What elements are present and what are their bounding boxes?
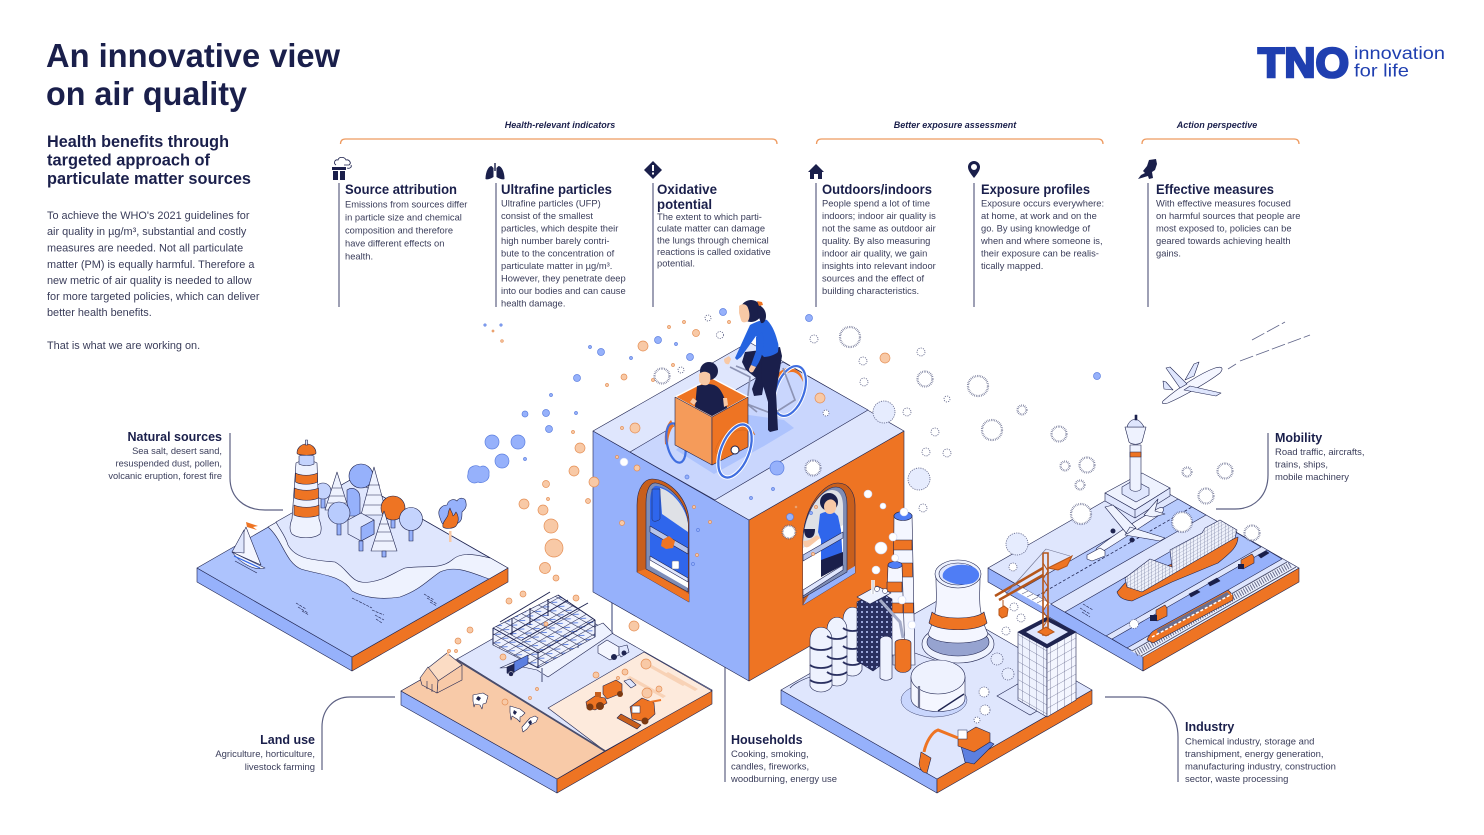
particles: peach coarse matter (448, 320, 890, 705)
truck left (507, 655, 528, 676)
trucks and cars on road (1150, 551, 1269, 621)
icon: chimney with cloud (332, 157, 351, 180)
storage tank (901, 660, 967, 717)
bracket: Health-relevant indicators (340, 120, 777, 144)
icon: lungs (486, 163, 504, 179)
panel: outdoors/indoors: building characteristics. (822, 286, 919, 296)
panel: outdoors/indoors: indoor air quality, we gain (822, 248, 927, 258)
panel: outdoors/indoors: sources and the effect of (822, 274, 925, 284)
platform base (401, 602, 712, 793)
control tower (1105, 415, 1170, 518)
panel: outdoors/indoors: Outdoors/indoors (822, 182, 932, 197)
combine harvester (617, 698, 661, 729)
callout: households: woodburning, energy use (730, 774, 837, 785)
platform base (781, 601, 1092, 793)
panel: effective measures: geared towards achieving health (1156, 236, 1291, 246)
intro text: new metric of air quality is needed to allow (47, 275, 252, 287)
panel: source attribution: in particle size and chemical (345, 212, 462, 222)
subheading: targeted approach of (47, 152, 211, 170)
title: An innovative view (46, 37, 340, 74)
intro text: That is what we are working on. (47, 340, 200, 352)
platform: mobility (988, 415, 1299, 671)
panel: outdoors/indoors: indoors; indoor air quality is (822, 211, 936, 221)
panel: effective measures: With effective measures focused (1156, 198, 1291, 208)
callout: industry (1105, 697, 1336, 785)
icon: warning diamond (644, 161, 662, 179)
platform base (988, 479, 1299, 671)
title: on air quality (46, 75, 248, 112)
ground shadow (676, 410, 794, 474)
panel: exposure profiles: Exposure profiles (981, 182, 1090, 197)
logo: TNO innovation for life (1258, 39, 1445, 86)
tractor with trailer and bale (586, 679, 636, 710)
runway (1017, 499, 1206, 608)
truck right (598, 640, 629, 660)
right window (803, 483, 855, 605)
subheading: particulate matter sources (47, 170, 251, 188)
panel: exposure profiles: when and where someone is, (980, 236, 1103, 246)
greenhouse (493, 592, 595, 668)
land and sand (268, 479, 508, 598)
callout: industry: sector, waste processing (1185, 774, 1288, 785)
particles: ultrafine dotted rings (654, 315, 1260, 723)
panel: ultrafine particles: consist of the smallest (501, 211, 593, 221)
panel: outdoors/indoors (808, 164, 936, 307)
callout: households: candles, fireworks, (731, 762, 809, 772)
barn (420, 650, 462, 693)
panel: exposure profiles: Exposure occurs everywhere: (981, 198, 1104, 208)
platform: natural sources (197, 440, 508, 671)
yard around greenhouse (500, 623, 613, 677)
panel: source attribution (332, 157, 467, 307)
panel: ultrafine particles: However, they penetrate deep (501, 274, 626, 284)
panel: source attribution: have different effects on (345, 238, 444, 248)
cargo box back and child (675, 362, 748, 417)
icon: map of the Netherlands (1138, 159, 1157, 179)
sailboat (232, 522, 265, 573)
panel: ultrafine particles: particulate matter in µg/m³. (501, 261, 612, 271)
panel: effective measures: on harmful sources that people are (1156, 211, 1300, 221)
panel: ultrafine particles: particles, which despite their (501, 224, 618, 234)
callout: natural sources: volcanic eruption, forest fire (108, 471, 222, 481)
panel: outdoors/indoors: not the same as outdoor air (822, 224, 936, 234)
container ship (1117, 520, 1238, 601)
logo: TNO innovation for life: innovation (1354, 43, 1445, 63)
callout: industry: Chemical industry, storage and (1185, 736, 1314, 748)
subheading: Health benefits through (47, 133, 229, 151)
platform base (197, 479, 508, 671)
panel: effective measures: most exposed to, policies can be (1156, 224, 1292, 234)
platform: industry (781, 512, 1092, 793)
cows (473, 693, 538, 732)
flying airplane with contrails (1162, 322, 1310, 404)
callout: industry: transhipment, energy generation, (1185, 749, 1324, 760)
intro text: matter (PM) is equally harmful. Therefore a (47, 259, 255, 271)
panel: exposure profiles (968, 161, 1104, 307)
callout: land use: Agriculture, horticulture, (215, 749, 315, 760)
water (1065, 523, 1261, 636)
callout: natural sources (108, 430, 283, 510)
logo: TNO innovation for life: for life (1354, 60, 1409, 80)
panel: oxidative potential: potential (657, 197, 712, 212)
panel: ultrafine particles: into our bodies and can cause (501, 286, 626, 296)
callout: households: Households (731, 733, 803, 747)
callout: land use: Land use (260, 733, 315, 747)
orange vessel (895, 639, 911, 672)
logo: TNO innovation for life: TNO (1258, 39, 1349, 86)
ground vehicle (1087, 548, 1105, 561)
bracket: Better exposure assessment: Better exposure assessment (894, 120, 1017, 130)
panel: exposure profiles: their exposure can be realis- (981, 248, 1099, 258)
intro text: for more targeted policies, which can deliver (47, 291, 260, 303)
excavator (919, 727, 994, 773)
rear wheel and fender (768, 362, 812, 420)
bracket: Better exposure assessment (816, 120, 1103, 144)
cube: household (593, 342, 904, 681)
callout: natural sources: resuspended dust, pollen, (116, 458, 222, 468)
title (46, 37, 340, 112)
panel: exposure profiles: go. By using knowledge of (981, 224, 1090, 234)
panel: exposure profiles: tically mapped. (981, 261, 1043, 271)
panel: exposure profiles: at home, at work and on the (981, 211, 1097, 221)
refinery tower (857, 580, 903, 680)
silos (810, 607, 862, 692)
panel: oxidative potential: potential. (657, 259, 695, 269)
blue left face (593, 431, 749, 681)
cargo bike with rider and child (663, 300, 812, 482)
icon: house (808, 164, 824, 179)
panel: ultrafine particles: Ultrafine particles (501, 182, 612, 197)
left front wheel (663, 420, 689, 464)
roof (593, 342, 904, 520)
callout: mobility: trains, ships, (1275, 460, 1328, 470)
panel: ultrafine particles: health damage. (501, 298, 565, 308)
road (1112, 550, 1282, 648)
rear leg (742, 350, 766, 396)
bike frame and handlebar (730, 366, 795, 414)
chimney rear (892, 512, 915, 665)
intro text: measures are needed. Not all particulate (47, 242, 243, 254)
callout: natural sources: Sea salt, desert sand, (132, 446, 222, 456)
callout: mobility: Mobility (1275, 431, 1322, 445)
panel: source attribution: Emissions from sources differ (345, 200, 467, 210)
callout: mobility: mobile machinery (1275, 472, 1349, 483)
callout: natural sources: Natural sources (128, 430, 222, 444)
callout: land use (215, 697, 395, 773)
callout: industry: manufacturing industry, construction (1185, 762, 1336, 772)
intro text: To achieve the WHO's 2021 guidelines for (47, 210, 250, 222)
subheading (47, 133, 251, 188)
fence (457, 660, 605, 751)
panel: effective measures: gains. (1156, 248, 1181, 258)
bracket: Action perspective: Action perspective (1176, 120, 1257, 130)
building under construction (1018, 617, 1076, 717)
orange right face (749, 431, 904, 681)
train (1147, 590, 1233, 643)
intro text: better health benefits. (47, 307, 152, 319)
panel: ultrafine particles: high number barely contri- (501, 236, 610, 246)
callout: mobility (1216, 431, 1365, 509)
cargo box front (675, 397, 748, 465)
panel: outdoors/indoors: People spend a lot of time (822, 198, 930, 208)
left window (637, 479, 689, 602)
callout: industry: Industry (1185, 720, 1234, 734)
panel: outdoors/indoors: quality. By also measuring (822, 236, 930, 246)
intro text (47, 210, 260, 352)
panel: source attribution: composition and therefore (345, 226, 453, 236)
ripple (1080, 604, 1093, 617)
panel: oxidative potential: The extent to which parti- (657, 212, 762, 222)
bracket: Health-relevant indicators: Health-relevant indicators (505, 120, 615, 130)
panel: oxidative potential: reactions is called oxidative (657, 247, 771, 257)
platform: land use (401, 592, 712, 793)
panel: ultrafine particles: bute to the concentration of (501, 248, 615, 258)
panel: oxidative potential: culate matter can damage (657, 224, 765, 234)
cooling tower (922, 560, 994, 663)
icon: location pin (968, 161, 980, 178)
intro text: air quality in µg/m³, substantial and costly (47, 226, 247, 238)
bracket: Action perspective (1142, 120, 1299, 144)
callout: households (725, 640, 837, 785)
panel: oxidative potential: Oxidative (657, 182, 717, 197)
right front wheel and fender (712, 420, 758, 482)
particles: blue matter (468, 308, 1101, 566)
lamp posts (542, 597, 612, 682)
fields (401, 652, 712, 779)
parked airplane (1096, 499, 1165, 551)
panel: source attribution: health. (345, 252, 373, 262)
fire and smoke (439, 498, 466, 542)
lighthouse (290, 440, 321, 538)
panel: ultrafine particles (486, 163, 626, 308)
callout: households: Cooking, smoking, (731, 749, 809, 760)
panel: effective measures: Effective measures (1156, 182, 1274, 197)
panel: effective measures (1138, 159, 1300, 307)
panel: outdoors/indoors: insights into relevant indoor (822, 261, 936, 271)
rider (724, 300, 782, 432)
callout: mobility: Road traffic, aircrafts, (1275, 447, 1365, 458)
panel: oxidative potential: the lungs through chemical (657, 235, 769, 245)
foundations (790, 652, 1076, 715)
panel: oxidative potential (644, 161, 771, 307)
rail track (1131, 562, 1298, 657)
ripples (296, 594, 437, 623)
trees (315, 464, 422, 557)
particles: white solid on the orange wall (620, 458, 916, 629)
callout: land use: livestock farming (245, 762, 315, 773)
panel: ultrafine particles: Ultrafine particles (UFP) (501, 198, 601, 208)
tower crane (995, 549, 1072, 636)
chimney front (885, 562, 905, 655)
panel: source attribution: Source attribution (345, 182, 457, 197)
